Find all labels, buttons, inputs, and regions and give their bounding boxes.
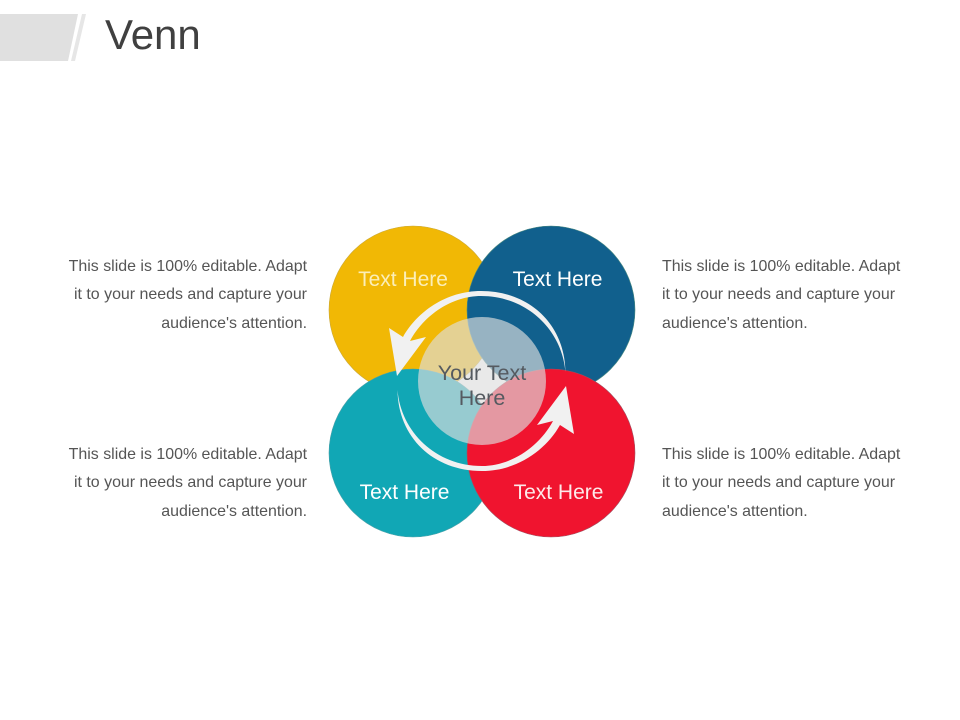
text block: bottom right: This slide is 100% editable. Adapt — [662, 446, 900, 463]
text block: top left: This slide is 100% editable. Adapt — [69, 258, 307, 275]
label: teal circle: Text Here — [360, 481, 449, 504]
center label: Your Text — [438, 361, 526, 385]
text block: top right — [662, 258, 900, 332]
text block: top right: it to your needs and capture your — [662, 286, 895, 303]
header banner — [0, 14, 86, 61]
circle: blue — [467, 226, 635, 394]
label: blue circle: Text Here — [513, 268, 602, 291]
text block: bottom right: audience's attention. — [662, 503, 808, 520]
circle: teal — [329, 369, 497, 537]
text block: top right: audience's attention. — [662, 315, 808, 332]
text block: bottom left: audience's attention. — [161, 503, 307, 520]
title: Venn — [105, 11, 201, 58]
text block: bottom right: it to your needs and capture your — [662, 474, 895, 491]
text block: bottom left: it to your needs and capture your — [74, 474, 307, 491]
text block: top left — [69, 258, 307, 332]
text block: top right: This slide is 100% editable. Adapt — [662, 258, 900, 275]
circle: yellow — [329, 226, 497, 394]
text block: top left: audience's attention. — [161, 315, 307, 332]
label: red circle: Text Here — [514, 481, 603, 504]
arrow: top counterclockwise — [389, 291, 566, 376]
text block: bottom left: This slide is 100% editable. Adapt — [69, 446, 307, 463]
arrow: bottom counterclockwise — [398, 386, 574, 471]
center label: Here — [459, 386, 505, 410]
text block: bottom left — [69, 446, 307, 520]
circle: red — [467, 369, 635, 537]
label: yellow circle: Text Here — [358, 268, 448, 291]
text block: top left: it to your needs and capture your — [74, 286, 307, 303]
text block: bottom right — [662, 446, 900, 520]
center circle — [418, 317, 546, 445]
